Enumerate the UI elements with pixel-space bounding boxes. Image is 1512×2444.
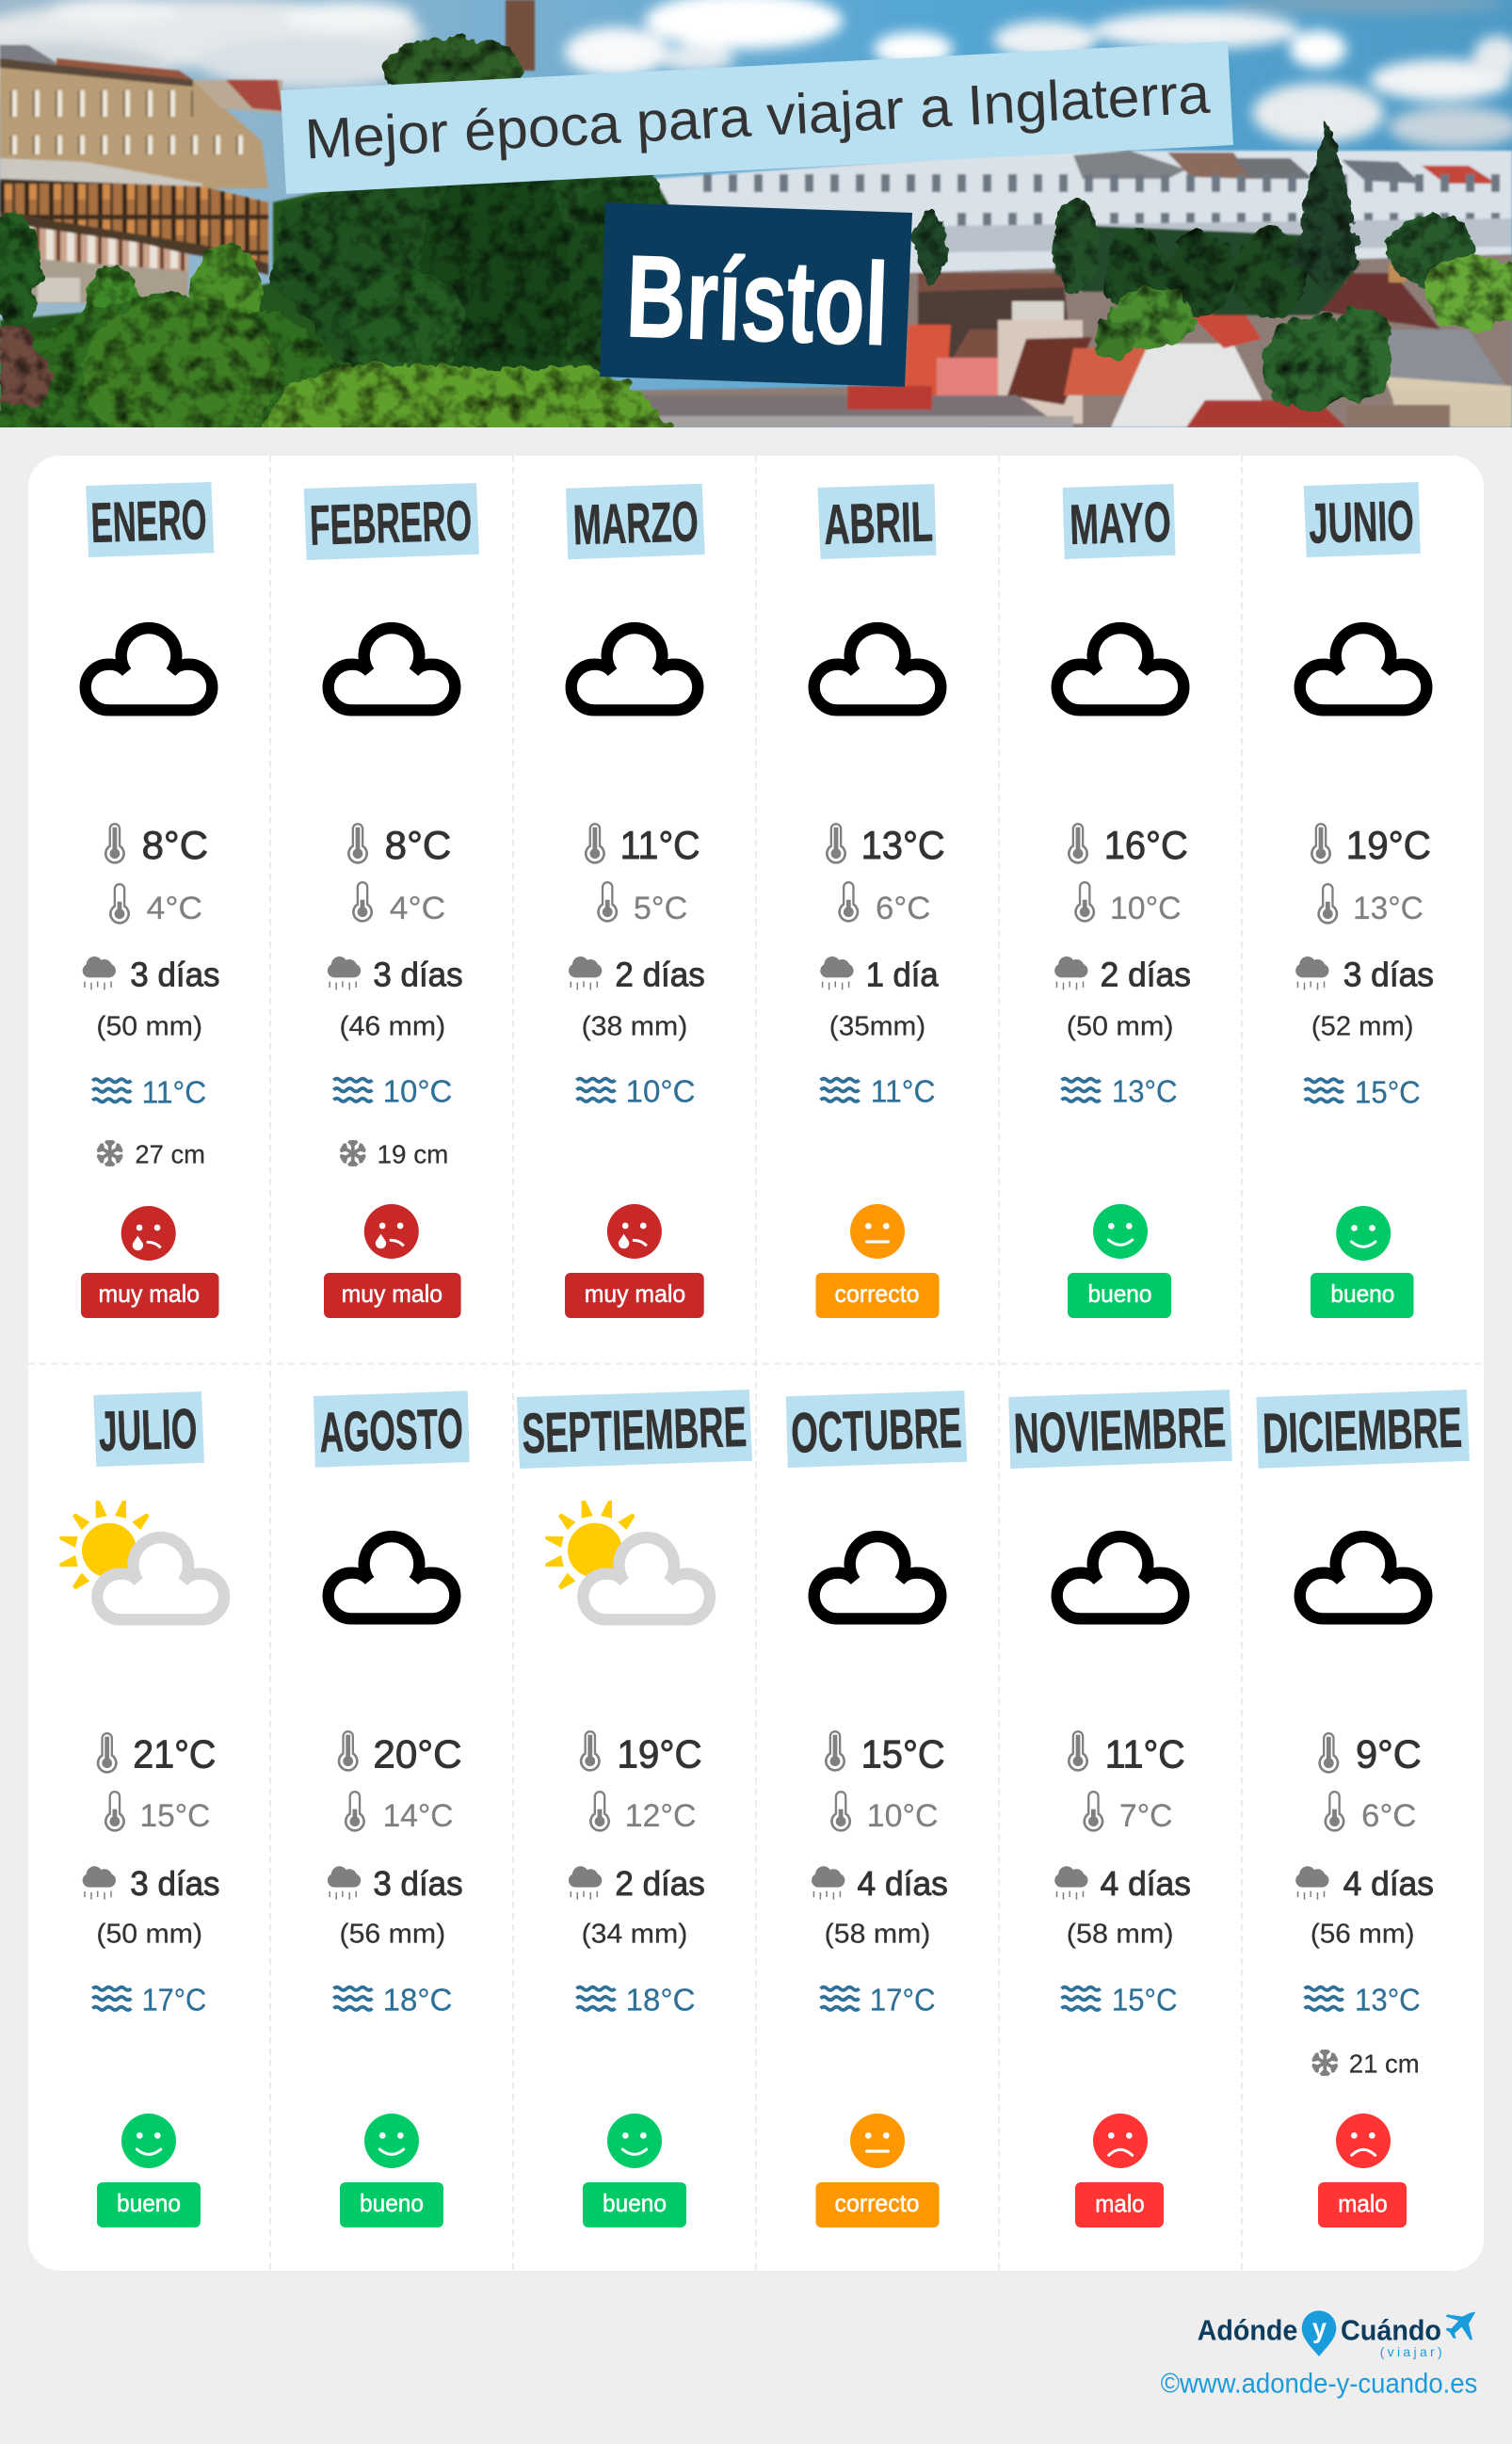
- heading: agosto: AGOSTO: [318, 1397, 464, 1464]
- icon: cloud: [1057, 1536, 1183, 1618]
- right trees: [915, 213, 945, 281]
- icon: rating face: [364, 2114, 419, 2168]
- panel: noviembre: [1008, 1390, 1232, 2227]
- min temperature: [1083, 1791, 1172, 1834]
- heading: noviembre: [1008, 1390, 1232, 1469]
- heading: abril: [817, 484, 936, 559]
- max temperature: 16°C: [1104, 823, 1188, 867]
- logo: Adónde y Cuándo: y: [1312, 2313, 1327, 2344]
- rain days: 3 días: [130, 1864, 220, 1903]
- snow: [339, 1140, 448, 1169]
- rain days: [569, 956, 705, 994]
- rain days: [820, 956, 940, 994]
- rain days: [328, 1864, 463, 1903]
- heading: noviembre: NOVIEMBRE: [1013, 1395, 1227, 1465]
- max temperature: [1311, 823, 1431, 867]
- heading: julio: [93, 1391, 204, 1467]
- min temperature: [1324, 1791, 1416, 1834]
- heading: enero: ENERO: [90, 488, 208, 555]
- rating badge: muy malo: [342, 1279, 442, 1308]
- icon: map pin: [1302, 2310, 1336, 2356]
- panel: marzo: [565, 484, 705, 1318]
- max temperature: 19°C: [618, 1732, 702, 1777]
- heading: mayo: MAYO: [1069, 490, 1172, 556]
- min temperature: [597, 881, 687, 926]
- icon: rating face: [121, 1206, 176, 1261]
- logo: Adónde y Cuándo: Cuándo: [1341, 2314, 1441, 2347]
- rain days: [1295, 956, 1434, 994]
- sea temperature: [1062, 1073, 1177, 1108]
- rainfall: (50 mm): [1067, 1011, 1173, 1041]
- heading: julio: JULIO: [98, 1397, 198, 1463]
- title banner: Mejor época para viajar a Inglaterra: [303, 62, 1212, 170]
- heading: febrero: [304, 483, 479, 560]
- left building: [0, 58, 268, 188]
- icon: cloud: [814, 1536, 941, 1618]
- rating badge: [815, 2182, 940, 2227]
- panel: monthly weather table: [28, 456, 1484, 2271]
- min temperature: 6°C: [876, 891, 930, 926]
- snow: 19 cm: [377, 1140, 448, 1169]
- min temperature: 7°C: [1119, 1798, 1172, 1834]
- rain days: 2 días: [615, 956, 705, 994]
- rain days: [83, 1864, 220, 1903]
- max temperature: 13°C: [861, 823, 945, 867]
- sea temperature: 17°C: [870, 1983, 936, 2018]
- max temperature: [338, 1730, 462, 1777]
- website credit: ©www.adonde-y-cuando.es: [1161, 2369, 1477, 2400]
- rain days: 4 días: [1343, 1864, 1434, 1903]
- sea temperature: [1305, 1075, 1421, 1110]
- rating badge: bueno: [603, 2189, 667, 2217]
- min temperature: 5°C: [634, 891, 687, 926]
- max temperature: [585, 823, 700, 867]
- rain days: [1295, 1864, 1434, 1903]
- min temperature: 15°C: [139, 1798, 210, 1834]
- heading: octubre: OCTUBRE: [790, 1396, 963, 1465]
- sea temperature: [576, 1073, 695, 1108]
- rain days: 4 días: [857, 1864, 948, 1903]
- sea temperature: 17°C: [142, 1983, 206, 2018]
- max temperature: [105, 823, 208, 867]
- rain days: [812, 1864, 948, 1903]
- rating badge: [1075, 2182, 1164, 2227]
- min temperature: [589, 1791, 697, 1834]
- roofs lower right: [603, 254, 1512, 427]
- min temperature: [345, 1791, 453, 1834]
- logo: Adónde y Cuándo: (viajar): [1380, 2344, 1442, 2359]
- min temperature: [830, 1791, 938, 1834]
- rating badge: [583, 2182, 686, 2227]
- min temperature: 4°C: [147, 891, 202, 926]
- rain days: [1054, 956, 1191, 994]
- rating badge: [565, 1273, 704, 1318]
- icon: rating face: [121, 2114, 176, 2168]
- header photo: Bristol skyline: [0, 0, 1512, 447]
- sea temperature: [333, 1073, 452, 1108]
- rating badge: [815, 1273, 940, 1318]
- min temperature: 13°C: [1353, 891, 1424, 926]
- icon: rating face: [1093, 2114, 1148, 2168]
- icon: cloud: [1300, 628, 1426, 710]
- heading: marzo: MARZO: [572, 490, 700, 556]
- icon: cloud: [329, 628, 455, 710]
- panel: febrero: [304, 483, 479, 1318]
- min temperature: [838, 881, 930, 926]
- min temperature: [1317, 883, 1424, 926]
- rainfall: (50 mm): [96, 1919, 202, 1949]
- rain days: 1 día: [866, 956, 940, 994]
- logo: Adónde y Cuándo: Adónde: [1198, 2314, 1297, 2347]
- tree by tower: [381, 37, 523, 105]
- icon: rating face: [607, 2114, 662, 2168]
- min temperature: 6°C: [1361, 1798, 1416, 1834]
- snow: [96, 1140, 205, 1169]
- icon: cloud: [1300, 1536, 1426, 1618]
- rain days: 2 días: [615, 1864, 705, 1903]
- rating badge: [81, 1273, 218, 1318]
- sea temperature: 13°C: [1112, 1073, 1177, 1108]
- icon: rating face: [607, 1204, 662, 1259]
- min temperature: 10°C: [1110, 891, 1182, 926]
- green trees left: [0, 210, 40, 327]
- rain days: [83, 956, 220, 994]
- heading: abril: ABRIL: [823, 490, 934, 556]
- panel: enero: [81, 482, 220, 1318]
- sea temperature: 15°C: [1112, 1983, 1177, 2018]
- rating badge: correcto: [834, 1279, 919, 1308]
- rain days: 3 días: [130, 956, 220, 994]
- rainfall: (34 mm): [582, 1919, 687, 1949]
- panel: junio: [1295, 482, 1434, 1318]
- snow: 27 cm: [135, 1140, 205, 1169]
- icon: rating face: [1336, 2114, 1391, 2168]
- terrace: [650, 151, 1512, 282]
- heading: septiembre: [517, 1390, 752, 1469]
- icon: rating face: [364, 1204, 419, 1259]
- icon: airplane: [1446, 2312, 1475, 2340]
- panel: septiembre: [517, 1390, 752, 2227]
- rain days: [569, 1864, 705, 1903]
- rating badge: bueno: [1088, 1279, 1152, 1308]
- snow: 21 cm: [1349, 2050, 1420, 2079]
- rating badge: bueno: [360, 2189, 424, 2217]
- max temperature: 15°C: [861, 1732, 945, 1777]
- dark big trees: [273, 160, 673, 400]
- sea temperature: 15°C: [1355, 1075, 1421, 1110]
- max temperature: [347, 823, 451, 867]
- sea temperature: [333, 1983, 452, 2018]
- rating badge: malo: [1095, 2190, 1145, 2218]
- rainfall: (58 mm): [1067, 1919, 1173, 1949]
- rain days: [1054, 1864, 1191, 1903]
- icon: sun and cloud: [59, 1501, 224, 1619]
- sea temperature: [821, 1983, 936, 2018]
- icon: rating face: [850, 1204, 905, 1259]
- panel: octubre: [786, 1391, 967, 2227]
- sea temperature: [92, 1983, 206, 2018]
- rainfall: (38 mm): [582, 1011, 687, 1041]
- rainfall: (50 mm): [96, 1011, 202, 1041]
- panel: diciembre: [1256, 1390, 1470, 2227]
- rain days: 3 días: [1343, 956, 1434, 994]
- max temperature: [825, 1730, 945, 1777]
- min temperature: [105, 1791, 210, 1834]
- max temperature: 8°C: [385, 823, 451, 867]
- rating badge: bueno: [1330, 1279, 1394, 1308]
- min temperature: 4°C: [390, 891, 445, 926]
- icon: rating face: [850, 2114, 905, 2168]
- rating badge: [340, 2182, 443, 2227]
- heading: octubre: [786, 1391, 967, 1468]
- sea temperature: [576, 1983, 695, 2018]
- icon: cloud: [571, 628, 698, 710]
- sea temperature: [1305, 1983, 1421, 2018]
- heading: septiembre: SEPTIEMBRE: [521, 1395, 748, 1465]
- heading: mayo: [1063, 484, 1175, 559]
- panel: agosto: [314, 1391, 470, 2227]
- rating badge: malo: [1338, 2190, 1388, 2218]
- rating badge: muy malo: [585, 1279, 685, 1308]
- rating badge: bueno: [117, 2189, 181, 2217]
- icon: cloud: [1057, 628, 1183, 710]
- heading: junio: [1304, 482, 1421, 557]
- heading: febrero: FEBRERO: [309, 489, 473, 557]
- min temperature: 12°C: [625, 1798, 697, 1834]
- heading: marzo: [566, 484, 705, 559]
- max temperature: 20°C: [373, 1732, 462, 1777]
- heading: junio: JUNIO: [1308, 489, 1415, 555]
- min temperature: [1074, 881, 1182, 926]
- max temperature: [1068, 1730, 1185, 1777]
- rainfall: (46 mm): [339, 1011, 445, 1041]
- sea temperature: 18°C: [626, 1983, 695, 2018]
- snow: [1311, 2050, 1420, 2079]
- logo: Adónde y Cuándo: [1198, 2310, 1475, 2359]
- icon: cloud: [86, 628, 212, 710]
- rain days: 2 días: [1101, 956, 1191, 994]
- rainfall: (52 mm): [1311, 1011, 1414, 1041]
- city name heading: [600, 202, 912, 387]
- rating badge: muy malo: [98, 1279, 200, 1308]
- max temperature: 11°C: [1105, 1732, 1185, 1777]
- rain days: 4 días: [1101, 1864, 1191, 1903]
- panel: mayo: [1054, 484, 1191, 1318]
- rating badge: [324, 1273, 461, 1318]
- rain days: 3 días: [373, 956, 463, 994]
- title banner: [281, 41, 1233, 194]
- max temperature: 9°C: [1356, 1732, 1422, 1777]
- max temperature: [1068, 823, 1188, 867]
- min temperature: 14°C: [383, 1798, 453, 1834]
- rainfall: (58 mm): [825, 1919, 930, 1949]
- sea temperature: 18°C: [383, 1983, 452, 2018]
- rain days: 3 días: [373, 1864, 463, 1903]
- tree backing: [0, 169, 673, 427]
- sea temperature: [1062, 1983, 1177, 2018]
- max temperature: 21°C: [133, 1732, 216, 1777]
- rating badge: [1318, 2182, 1407, 2227]
- rating badge: correcto: [834, 2189, 919, 2217]
- icon: cloud: [329, 1536, 455, 1618]
- icon: rating face: [1093, 1204, 1148, 1259]
- max temperature: [97, 1732, 216, 1777]
- icon: rating face: [1336, 1206, 1391, 1261]
- heading: enero: [86, 482, 214, 557]
- heading: agosto: [314, 1391, 470, 1468]
- max temperature: [580, 1730, 702, 1777]
- rating badge: [1068, 1273, 1171, 1318]
- icon: cloud: [814, 628, 941, 710]
- sea temperature: 11°C: [142, 1075, 206, 1110]
- min temperature: [109, 883, 202, 926]
- sea temperature: [821, 1073, 936, 1108]
- sea temperature: 11°C: [871, 1073, 936, 1108]
- rainfall: (56 mm): [339, 1919, 445, 1949]
- sea temperature: 10°C: [626, 1073, 695, 1108]
- rating badge: [1311, 1273, 1414, 1318]
- rating badge: [97, 2182, 201, 2227]
- sea temperature: [92, 1075, 206, 1110]
- sea temperature: 10°C: [383, 1073, 452, 1108]
- max temperature: 11°C: [620, 823, 700, 867]
- spire: [506, 0, 535, 71]
- max temperature: 19°C: [1346, 823, 1431, 867]
- max temperature: [1318, 1732, 1422, 1777]
- max temperature: 8°C: [142, 823, 208, 867]
- rain days: [328, 956, 463, 994]
- rainfall: (56 mm): [1311, 1919, 1414, 1949]
- panel: abril: [814, 484, 945, 1318]
- max temperature: [826, 823, 945, 867]
- min temperature: [352, 881, 445, 926]
- sea temperature: 13°C: [1355, 1983, 1421, 2018]
- icon: sun and cloud: [545, 1501, 710, 1619]
- city name heading: Brístol: [624, 232, 891, 370]
- rainfall: (35mm): [829, 1011, 925, 1041]
- panel: julio: [59, 1391, 224, 2227]
- min temperature: 10°C: [867, 1798, 938, 1834]
